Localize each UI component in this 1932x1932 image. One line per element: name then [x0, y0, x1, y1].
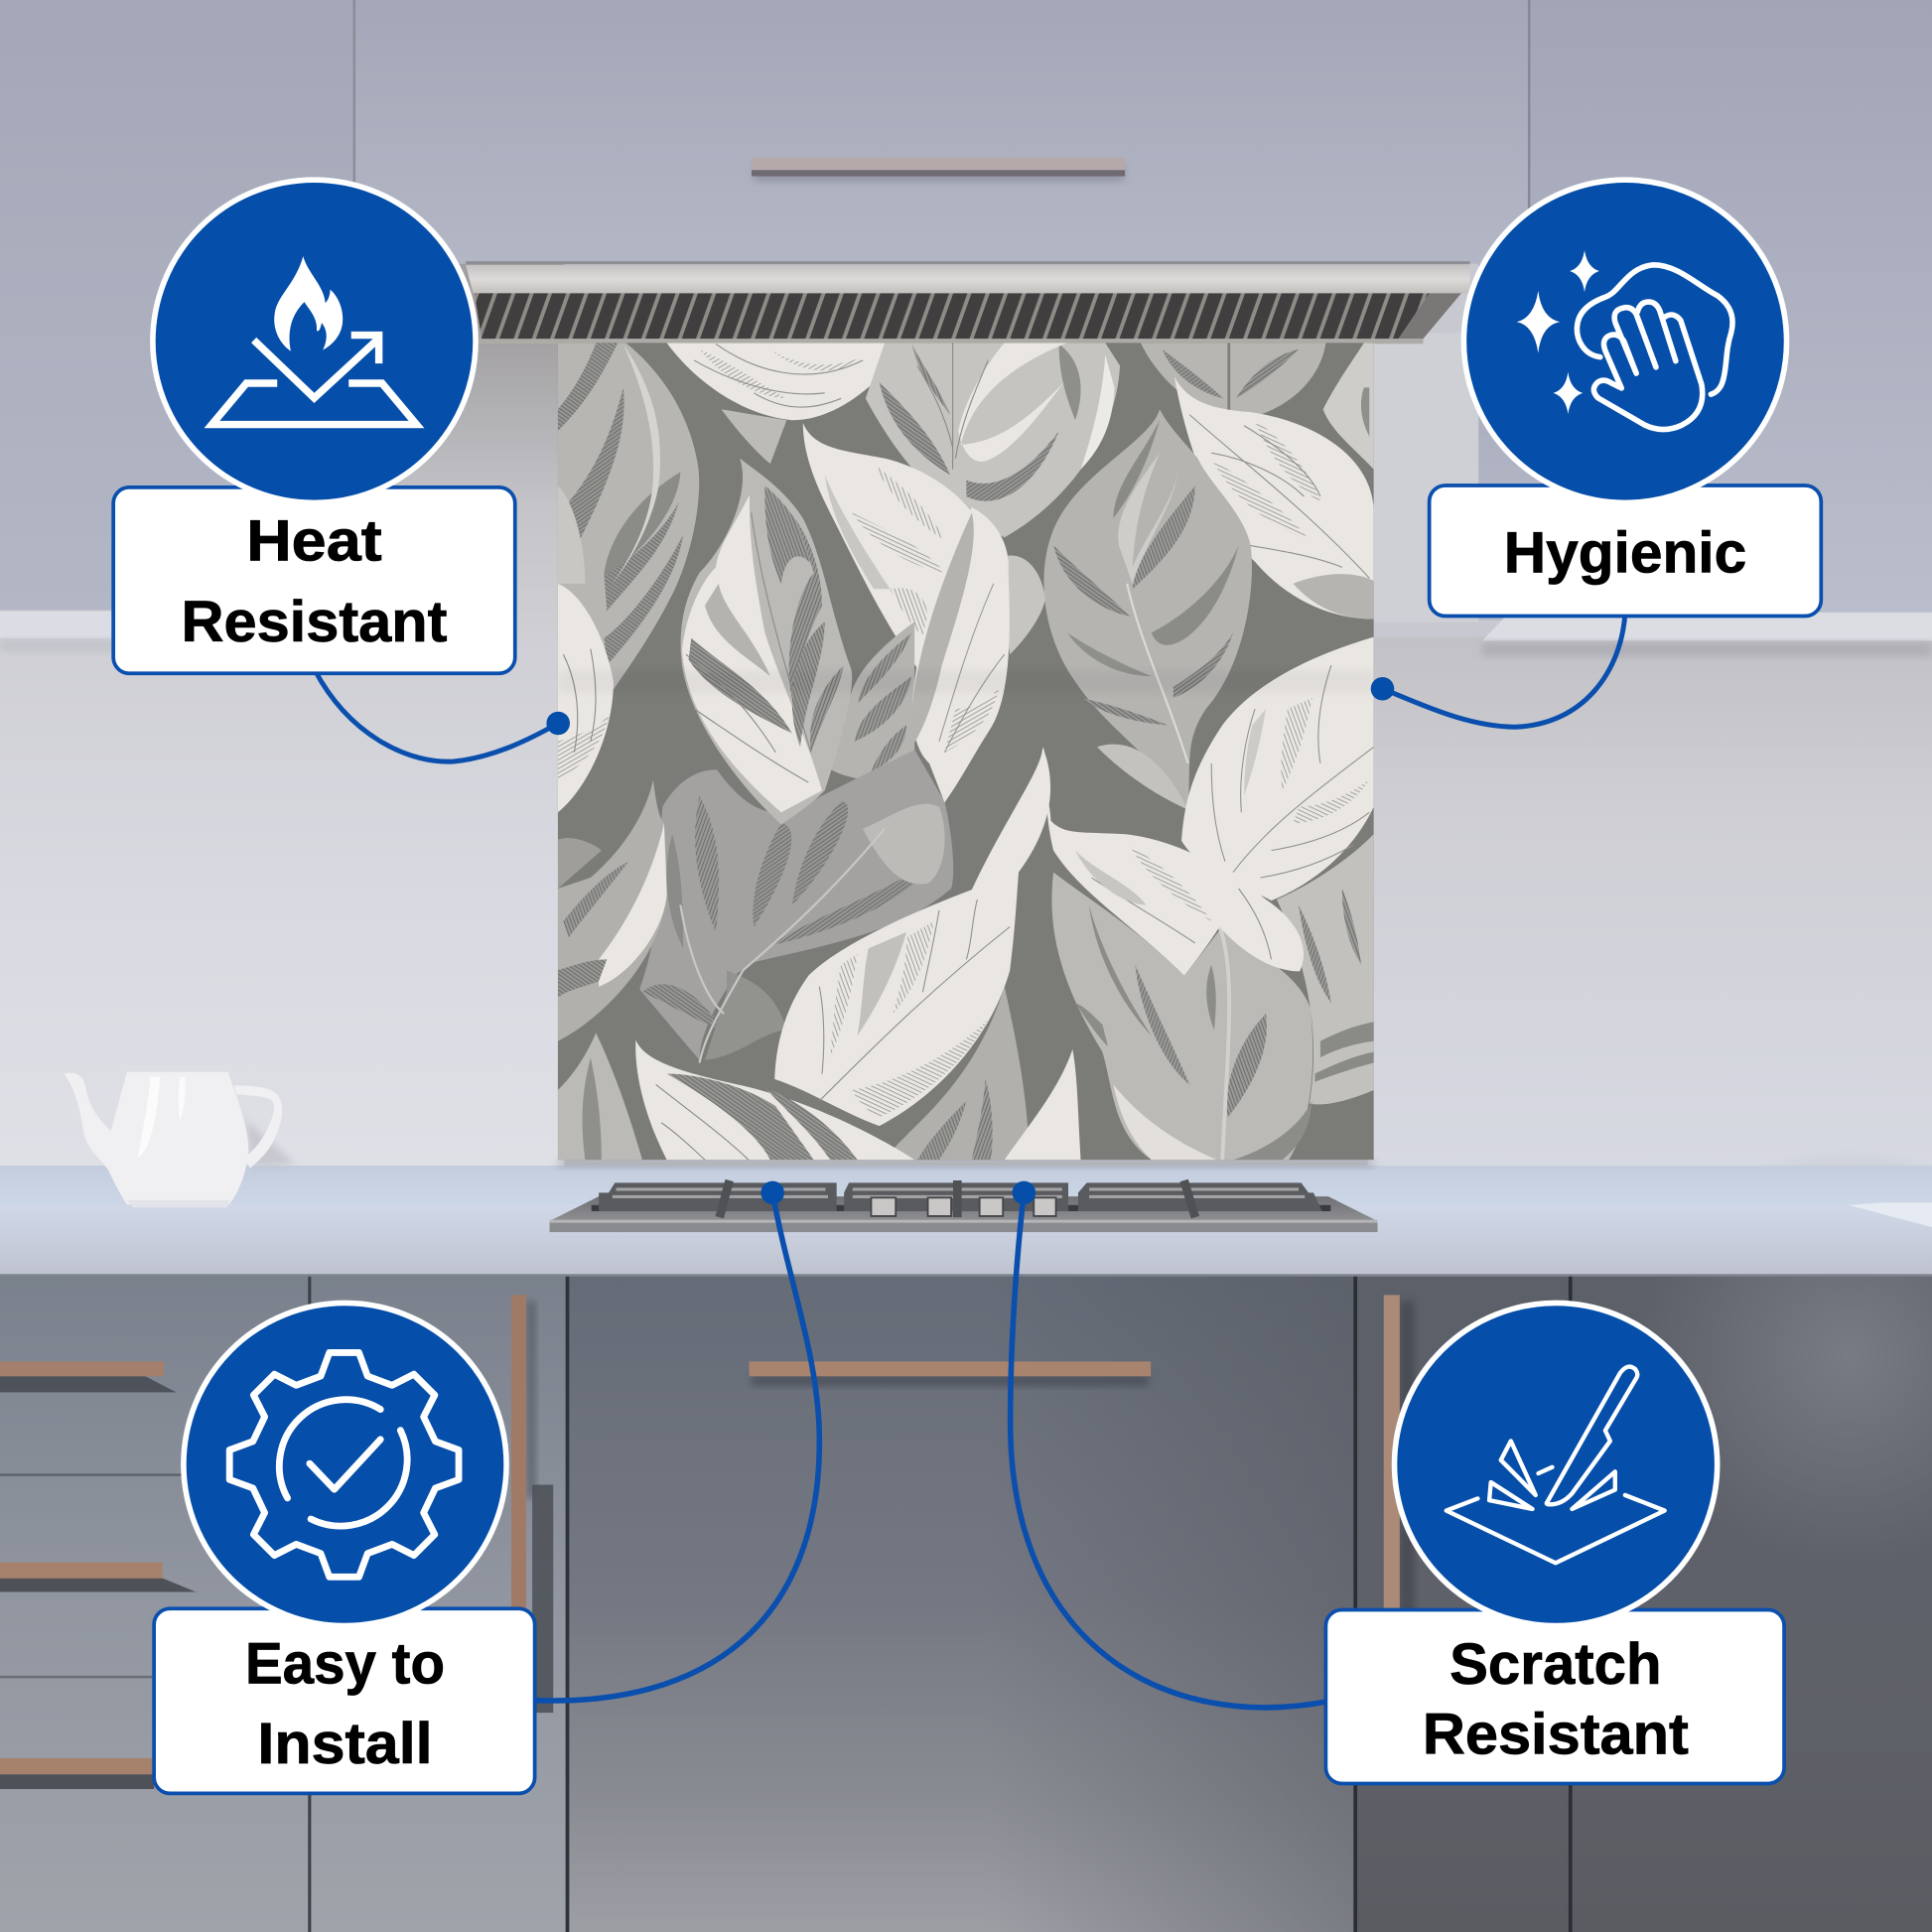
upper cabinet: right — [1529, 0, 1932, 613]
heading: scratch resistant: Scratch — [1449, 1632, 1662, 1697]
lower cabinets — [0, 1276, 311, 1932]
label: hygienic — [1430, 485, 1821, 617]
wall under hood: right — [1368, 333, 1529, 622]
heading: hygienic: Hygienic — [1504, 521, 1746, 586]
leaf: left white — [558, 584, 614, 812]
leaf: bottom left corner — [558, 1033, 642, 1160]
countertop — [0, 1166, 1932, 1206]
leaf: bottom left white — [635, 1040, 914, 1160]
cabinet ledge: left — [0, 612, 357, 638]
heading: heat: Heat — [246, 509, 382, 574]
heading: easy to install: Easy to — [245, 1631, 445, 1696]
leaf: small gray behind ribbon — [1008, 556, 1045, 654]
leaf: centre right dark — [1043, 409, 1252, 809]
splashback wall: left — [0, 637, 564, 1167]
leaf: top left — [558, 343, 699, 704]
leaf: centre top white — [803, 423, 980, 668]
icon: scratch resistant knife on surface — [1395, 1303, 1718, 1626]
leaf: right big white — [1181, 637, 1374, 900]
label: easy to install — [154, 1608, 535, 1793]
leaf: lower right white — [1043, 747, 1304, 976]
teapot — [65, 1072, 296, 1207]
upper cabinet: left — [0, 0, 354, 610]
leaf: dark striped centre — [832, 621, 915, 778]
cabinet handle: top — [752, 158, 1125, 181]
label: easy to install: Install — [257, 1712, 433, 1776]
label: scratch resistant — [1325, 1609, 1784, 1783]
cabinet handle: lower centre — [750, 1361, 1151, 1386]
leaf: centre ribbon — [911, 507, 1010, 802]
label: heat resistant: Resistant — [181, 590, 448, 654]
icon: hygienic hand wiping with sparkles — [1463, 180, 1787, 502]
wall under hood: left — [354, 264, 564, 640]
leaf: right bottom striped — [1277, 834, 1374, 1104]
leaf: lower centre translucent — [639, 750, 953, 1063]
leaf: bottom centre striped — [885, 987, 1081, 1160]
leaf: lower right gray — [1051, 873, 1312, 1160]
leaf: top white — [667, 344, 885, 464]
cabinet ledge: right — [1482, 613, 1932, 640]
connector: easy to install — [536, 1181, 819, 1701]
label: scratch resistant: Resistant — [1423, 1703, 1689, 1767]
hob grates — [599, 1180, 1322, 1217]
connector: heat resistant — [314, 669, 570, 761]
icon: heat resistant flame and surface — [153, 180, 476, 502]
splashback wall: right — [1368, 637, 1932, 1167]
panel: leaf wallpaper splashback — [558, 343, 1374, 1168]
hob knobs — [871, 1197, 1056, 1216]
cabinet handle: vertical right — [1384, 1295, 1415, 1652]
leaf: centre white — [681, 459, 852, 824]
leaf: top right white — [1174, 376, 1374, 619]
cabinet handle: vertical left — [511, 1295, 553, 1713]
leaf: top centre striped — [866, 343, 1120, 537]
connector: hygienic — [1371, 613, 1625, 727]
label: heat resistant — [113, 487, 515, 673]
leaf: top right striped — [1141, 343, 1374, 470]
leaf: lower left — [558, 779, 667, 1041]
leaf: centre lower white — [774, 747, 1050, 1126]
connector: scratch resistant — [1011, 1181, 1327, 1708]
upper cabinet: centre — [354, 0, 1529, 264]
cabinet handles: drawers — [0, 1361, 196, 1789]
icon: easy to install gear with check — [184, 1303, 506, 1626]
hob — [550, 1180, 1378, 1232]
cooker hood — [466, 261, 1470, 344]
